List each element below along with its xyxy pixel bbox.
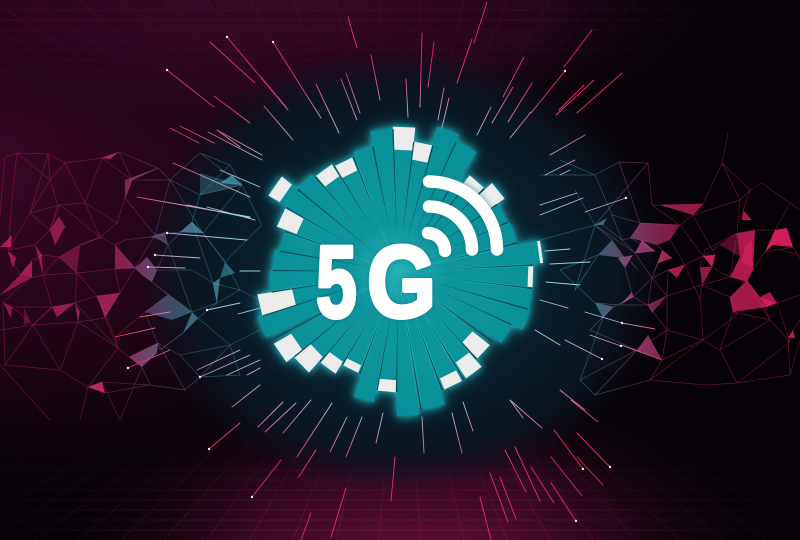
dark gaps between dial bars	[263, 129, 533, 410]
icon: wifi signal arcs	[428, 182, 497, 251]
ray end dots	[127, 36, 627, 522]
radial bar dial	[257, 127, 543, 416]
speed rays	[115, 2, 662, 540]
5G heading: G	[367, 225, 436, 339]
network mesh: left	[0, 152, 262, 420]
5G heading	[316, 225, 436, 339]
dial bars	[257, 127, 543, 416]
network facets: right	[595, 204, 795, 360]
network mesh: right	[540, 133, 800, 395]
5G heading: 5	[316, 225, 357, 339]
network facets: left	[0, 152, 242, 393]
